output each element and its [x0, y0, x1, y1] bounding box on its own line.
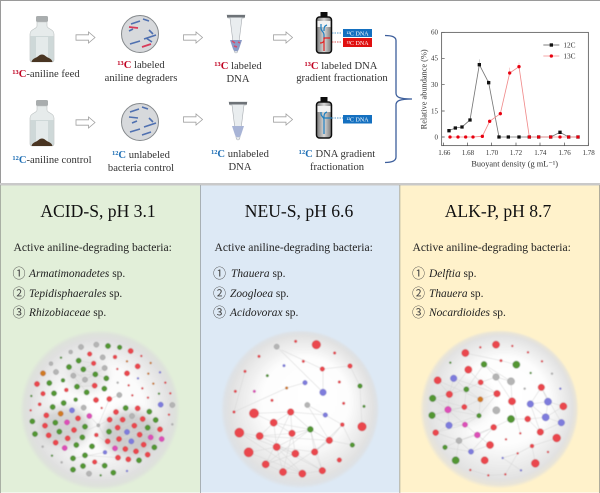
text: bacteria intro: Active aniline-degrading bacteria:	[214, 241, 373, 254]
label: 13C and 12C DNA boxes: ¹²C DNA	[346, 31, 369, 37]
list: ALK-P bacteria: Nocardioides sp.	[428, 307, 506, 319]
text: 12C DNA gradient fractionation: fractionation	[310, 162, 365, 173]
list: ACID-S bacteria: ③	[12, 302, 26, 321]
list: NEU-S bacteria: Thauera sp.	[231, 268, 286, 280]
y axis title: Relative abundance (%)	[419, 49, 428, 129]
text: 13C labeled DNA gradient fractionation: ¹³C labeled DNA	[305, 61, 377, 72]
heading: ACID-S: ACID-S, pH 3.1	[40, 201, 156, 221]
list: NEU-S bacteria	[213, 263, 298, 321]
x axis labels: 1.74	[534, 149, 547, 157]
list: ALK-P bacteria: Delftia sp.	[428, 268, 477, 280]
x axis labels: 1.70	[486, 149, 499, 157]
x axis labels: 1.76	[559, 149, 571, 157]
y axis labels: 60	[431, 29, 439, 37]
network: NEU-S	[221, 330, 379, 489]
list: ALK-P bacteria: ③	[412, 302, 425, 321]
icon: 13C aniline bottle	[30, 16, 54, 62]
list: ALK-P bacteria: ①	[412, 263, 425, 282]
list: ALK-P bacteria: ②	[412, 283, 425, 302]
text: 13C labeled DNA: DNA	[227, 74, 250, 85]
chart: buoyant density vs relative abundance	[419, 29, 595, 169]
arrow: bottle to control	[76, 117, 95, 128]
panel: ACID-S	[0, 185, 200, 493]
list: ACID-S bacteria: ①	[12, 263, 26, 282]
icon: 13C degraders dish	[122, 16, 158, 52]
label: 13C and 12C DNA boxes	[343, 29, 372, 47]
text: 12C unlabeled DNA: ¹²C unlabeled	[211, 149, 269, 160]
arrow: control to DNA	[184, 114, 202, 125]
legend	[543, 41, 576, 61]
arrow: control DNA to fractionation	[274, 114, 292, 125]
icon: 13C DNA tube	[227, 15, 245, 53]
panel: SIP workflow	[0, 0, 600, 186]
list: NEU-S bacteria: Zoogloea sp.	[230, 288, 289, 300]
y axis labels: 45	[431, 55, 439, 63]
panel: ALK-P	[400, 185, 600, 493]
series: 13C	[448, 63, 580, 139]
list: ACID-S bacteria	[12, 263, 125, 321]
legend: 12C	[563, 41, 576, 50]
heading: ALK-P: ALK-P, pH 8.7	[445, 201, 551, 221]
x axis labels	[438, 149, 595, 157]
y axis labels: 0	[434, 133, 438, 141]
list: ACID-S bacteria: Tepidisphaerales sp.	[29, 288, 122, 300]
list: NEU-S bacteria: Acidovorax sp.	[229, 307, 298, 319]
text: 13C labeled aniline degraders: aniline degraders	[105, 73, 177, 84]
x axis labels: 1.68	[462, 149, 475, 157]
list: ALK-P bacteria: Thauera sp.	[429, 288, 484, 300]
list: NEU-S bacteria: ②	[213, 283, 226, 302]
list: NEU-S bacteria: ③	[213, 302, 226, 321]
icon: 12C gradient column	[316, 97, 343, 138]
arrow: DNA to fractionation	[274, 32, 292, 43]
text: 13C labeled DNA gradient fractionation: gradient fractionation	[296, 73, 388, 84]
text: 13C labeled DNA: ¹³C labeled	[214, 61, 262, 72]
x axis labels: 1.72	[510, 149, 523, 157]
panel: NEU-S	[200, 185, 400, 493]
text: 13C-aniline feed: ¹³C-aniline feed	[12, 69, 80, 80]
y axis labels: 15	[431, 107, 439, 115]
arrow: brace joining both workflows	[385, 36, 412, 162]
x axis labels: 1.66	[438, 149, 451, 157]
text: 12C-aniline control: ¹²C-aniline control	[12, 155, 92, 166]
list: ACID-S bacteria: Rhizobiaceae sp.	[28, 307, 106, 319]
y axis labels: 30	[431, 81, 439, 89]
text: 12C unlabeled bacteria control: bacteria control	[108, 163, 174, 174]
x axis title: Buoyant density (g mL⁻¹)	[471, 160, 558, 169]
list: ACID-S bacteria: ②	[12, 283, 26, 302]
list: NEU-S bacteria: ①	[213, 263, 226, 282]
text: 12C unlabeled DNA: DNA	[229, 162, 252, 173]
text: 12C DNA gradient fractionation: ¹²C DNA gradient	[299, 149, 375, 160]
arrow: bottle to degraders	[76, 32, 95, 43]
text: bacteria intro: Active aniline-degrading bacteria:	[412, 241, 571, 254]
label: 12C DNA box: ¹²C DNA	[346, 118, 369, 124]
text: 12C unlabeled bacteria control: ¹²C unlabeled	[112, 150, 170, 161]
label: 12C DNA box	[343, 115, 372, 124]
icon: 12C control bottle	[30, 100, 54, 146]
y axis labels	[431, 29, 439, 141]
list: ALK-P bacteria	[412, 263, 506, 321]
icon: 12C control dish	[122, 104, 158, 140]
network: ACID-S	[20, 330, 180, 490]
label: 13C and 12C DNA boxes: ¹³C DNA	[346, 41, 369, 47]
text: bacteria intro: Active aniline-degrading bacteria:	[14, 241, 172, 254]
list: ACID-S bacteria: Armatimonadetes sp.	[28, 268, 125, 280]
x axis labels: 1.78	[583, 149, 595, 157]
network: ALK-P	[420, 330, 579, 489]
icon: 13C gradient column	[316, 12, 341, 53]
arrow: degraders to DNA	[184, 32, 202, 43]
icon: 12C DNA tube	[229, 102, 247, 140]
heading: NEU-S: NEU-S, pH 6.6	[245, 201, 353, 221]
legend: 13C	[563, 52, 576, 61]
series: 12C	[447, 59, 580, 139]
text: 13C labeled aniline degraders: ¹³C labeled	[117, 60, 165, 71]
